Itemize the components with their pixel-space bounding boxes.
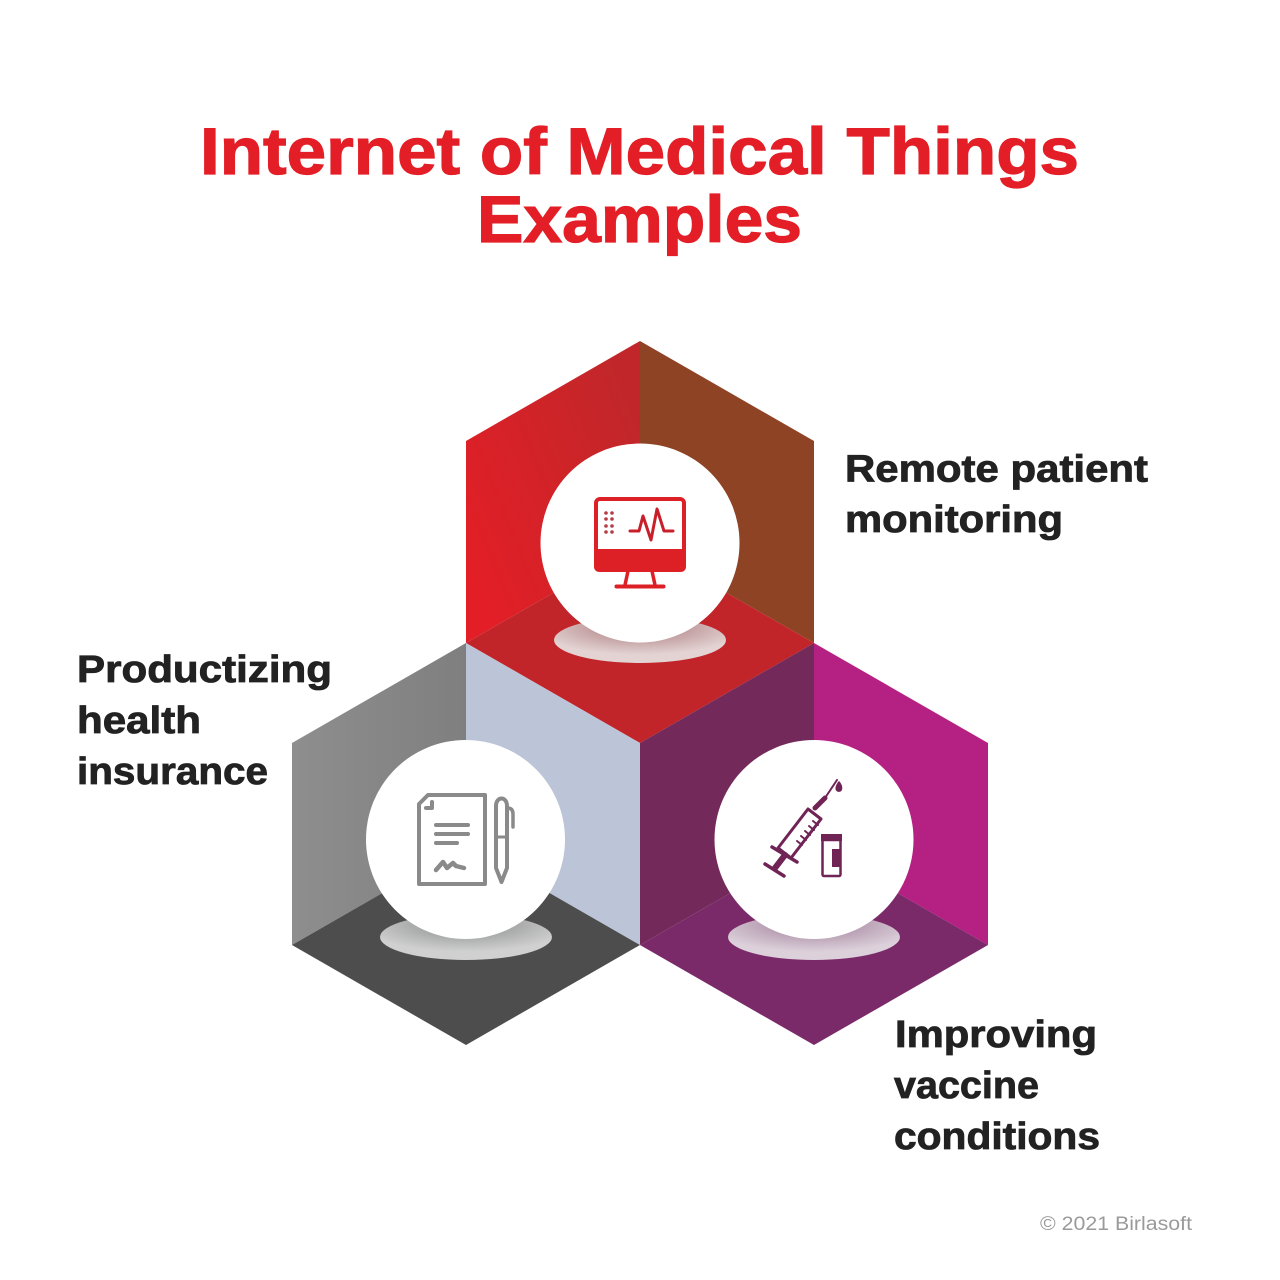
title: Internet of Medical Things xyxy=(200,114,1079,188)
icon: syringe and vial xyxy=(765,780,842,876)
panel: red hexagon xyxy=(466,341,814,743)
label: improving vaccine conditions: vaccine xyxy=(894,1065,1039,1107)
label: remote patient monitoring xyxy=(845,448,1148,541)
label: productizing health insurance xyxy=(77,649,332,793)
shadow ellipse xyxy=(728,914,900,960)
white circle xyxy=(714,740,914,939)
copyright: © 2021 Birlasoft xyxy=(1040,1214,1193,1235)
panel: purple hexagon xyxy=(640,643,988,1045)
label: remote patient monitoring: Remote patient xyxy=(845,448,1148,490)
icon: document and pen xyxy=(419,795,513,884)
panel: grey hexagon xyxy=(292,643,640,1045)
label: productizing health insurance: insurance xyxy=(77,751,268,793)
label: improving vaccine conditions: conditions xyxy=(894,1116,1100,1158)
title: Examples xyxy=(477,182,802,256)
title xyxy=(200,114,1079,256)
label: productizing health insurance: health xyxy=(77,700,201,742)
label: improving vaccine conditions: Improving xyxy=(895,1014,1097,1056)
icon: monitor with heartbeat xyxy=(594,499,686,588)
shadow ellipse xyxy=(554,617,726,663)
label: productizing health insurance: Productizing xyxy=(77,649,332,691)
shadow ellipse xyxy=(380,914,552,960)
label: remote patient monitoring: monitoring xyxy=(845,499,1063,541)
white circle xyxy=(366,740,565,939)
white circle xyxy=(540,444,740,642)
label: improving vaccine conditions xyxy=(894,1014,1100,1158)
